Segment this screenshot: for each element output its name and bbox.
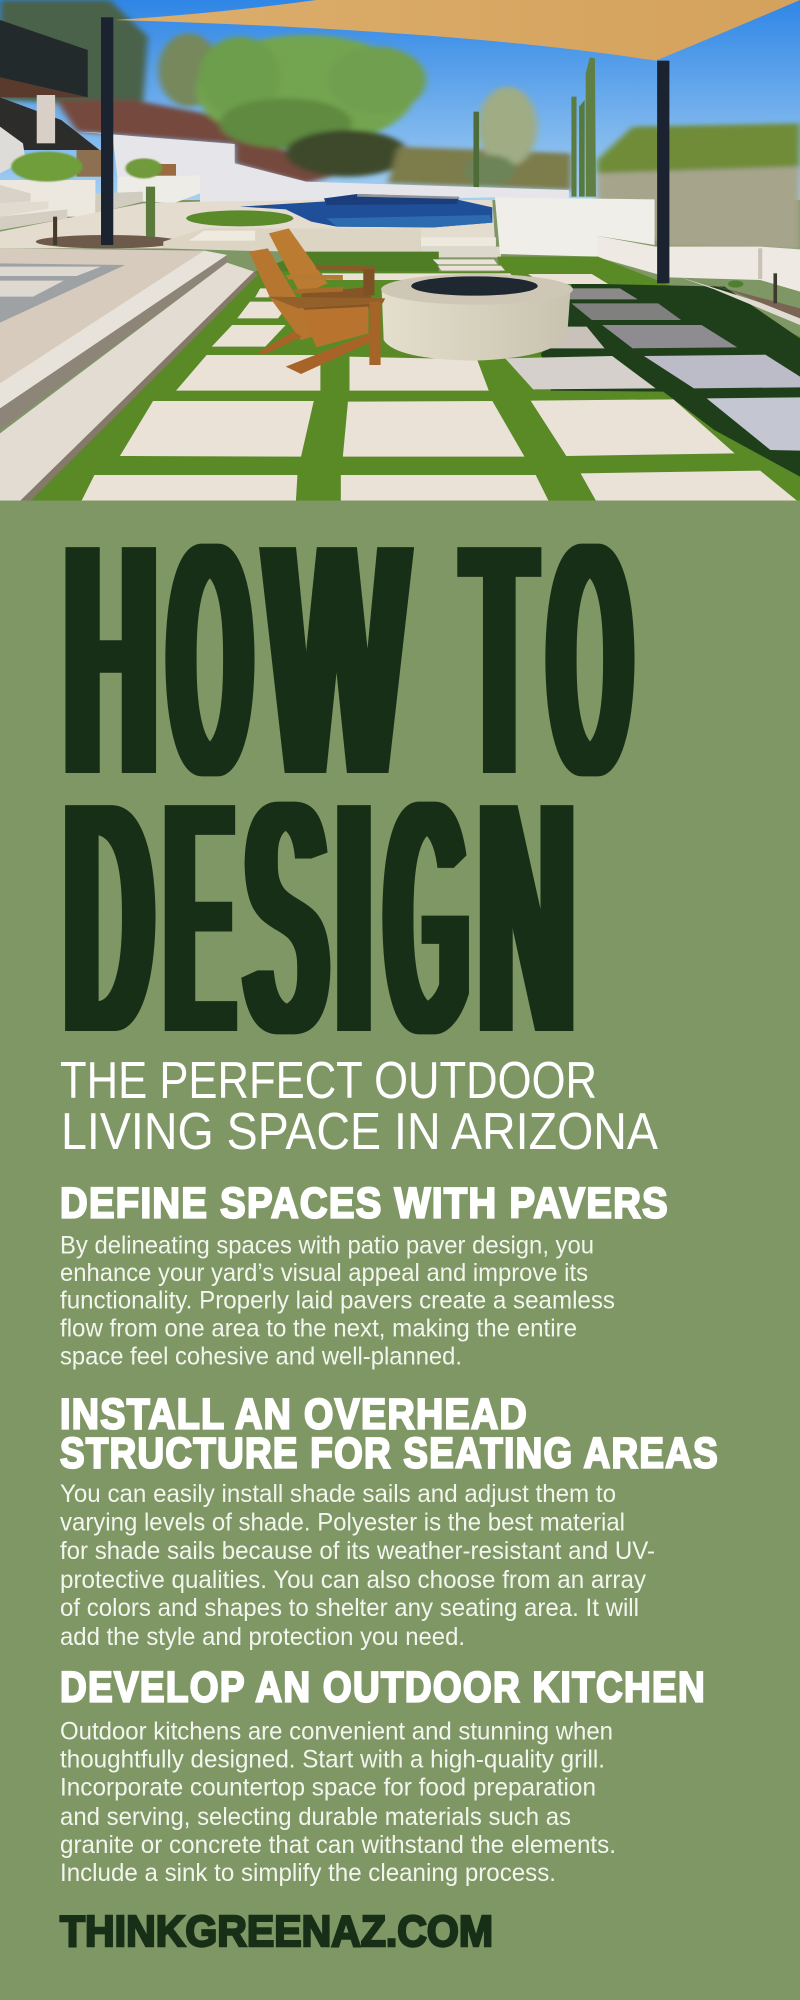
body text: define spaces: space feel cohesive and well-planned. [60, 1342, 462, 1370]
section heading: outdoor kitchen: DEVELOP AN OUTDOOR KITCHEN [60, 1664, 706, 1712]
white retaining walls [77, 132, 569, 203]
swimming pool [240, 194, 492, 227]
green band below photo [0, 501, 800, 510]
paver stones [82, 259, 800, 501]
background trees and hillside [0, 0, 800, 250]
main title: HOW TO DESIGN: T [464, 470, 534, 850]
fire pit [381, 274, 573, 361]
body text: outdoor kitchen [60, 1718, 616, 1887]
body text: outdoor kitchen: and serving, selecting durable materials such as [60, 1803, 571, 1831]
main title: HOW TO DESIGN: N [479, 728, 575, 1108]
body text: outdoor kitchen: Incorporate countertop space for food preparation [60, 1774, 596, 1802]
shade sail [115, 0, 800, 61]
main title: HOW TO DESIGN: S [244, 728, 327, 1108]
patio band [0, 200, 495, 248]
subtitle: LIVING SPACE IN ARIZONA [61, 1103, 658, 1161]
main title: HOW TO DESIGN: G [386, 728, 467, 1108]
round grass patch [186, 210, 293, 226]
paved terrace left [0, 248, 258, 501]
body text: overhead structure: You can easily install shade sails and adjust them to [60, 1480, 616, 1508]
body text: outdoor kitchen: granite or concrete that can withstand the elements. [60, 1831, 616, 1859]
subtitle: THE PERFECT OUTDOOR [60, 1052, 597, 1110]
planter and stone steps [0, 152, 162, 230]
main title: HOW TO DESIGN: D [65, 728, 153, 1108]
section heading: overhead structure [60, 1392, 719, 1478]
mulch planting bed [679, 273, 800, 325]
body text: define spaces [60, 1231, 615, 1370]
body text: outdoor kitchen: Outdoor kitchens are convenient and stunning when [60, 1718, 613, 1746]
body text: define spaces: enhance your yard’s visual appeal and improve its [60, 1259, 588, 1287]
lawn [31, 252, 800, 501]
section heading: overhead structure: STRUCTURE FOR SEATING AREAS [60, 1430, 719, 1478]
main title: HOW TO DESIGN: O [549, 470, 631, 850]
body text: define spaces: By delineating spaces with patio paver design, you [60, 1231, 594, 1259]
subtitle [60, 1052, 658, 1161]
section heading: overhead structure: INSTALL AN OVERHEAD [60, 1392, 528, 1438]
main title: HOW TO DESIGN [65, 470, 634, 1108]
website footer: THINKGREENAZ.COM [60, 1907, 493, 1956]
hero photo: patio with shade sail, fire pit and pavers [0, 0, 800, 500]
white wall right [495, 197, 800, 292]
body text: overhead structure: varying levels of shade. Polyester is the best material [60, 1508, 625, 1536]
body text: overhead structure: add the style and protection you need. [60, 1623, 465, 1651]
body text: define spaces: flow from one area to the next, making the entire [60, 1315, 577, 1343]
main title: HOW TO DESIGN: H [65, 470, 156, 850]
body text: overhead structure: for shade sails because of its weather-resistant and UV- [60, 1537, 655, 1565]
body text: overhead structure: protective qualities. You can also choose from an array [60, 1566, 646, 1594]
section heading: define spaces: DEFINE SPACES WITH PAVERS [60, 1180, 669, 1228]
adirondack chairs [249, 228, 385, 374]
main title: HOW TO DESIGN: I [337, 728, 371, 1108]
main title: HOW TO DESIGN: O [169, 470, 251, 850]
body text: outdoor kitchen: thoughtfully designed. Start with a high-quality grill. [60, 1746, 605, 1774]
dark shade-sail posts [101, 17, 669, 283]
body text: overhead structure: of colors and shapes to shelter any seating area. It will [60, 1594, 639, 1622]
body text: define spaces: functionality. Properly laid pavers create a seamless [60, 1287, 615, 1315]
main title: HOW TO DESIGN: E [166, 728, 233, 1108]
body text: overhead structure [60, 1480, 655, 1651]
house deck and stairs [0, 20, 99, 173]
sky [0, 0, 800, 200]
low wall and steps behind lawn [163, 228, 501, 257]
main title: HOW TO DESIGN: W [266, 470, 407, 850]
body text: outdoor kitchen: Include a sink to simplify the cleaning process. [60, 1859, 556, 1887]
mulch bed and landscape light [36, 187, 179, 248]
